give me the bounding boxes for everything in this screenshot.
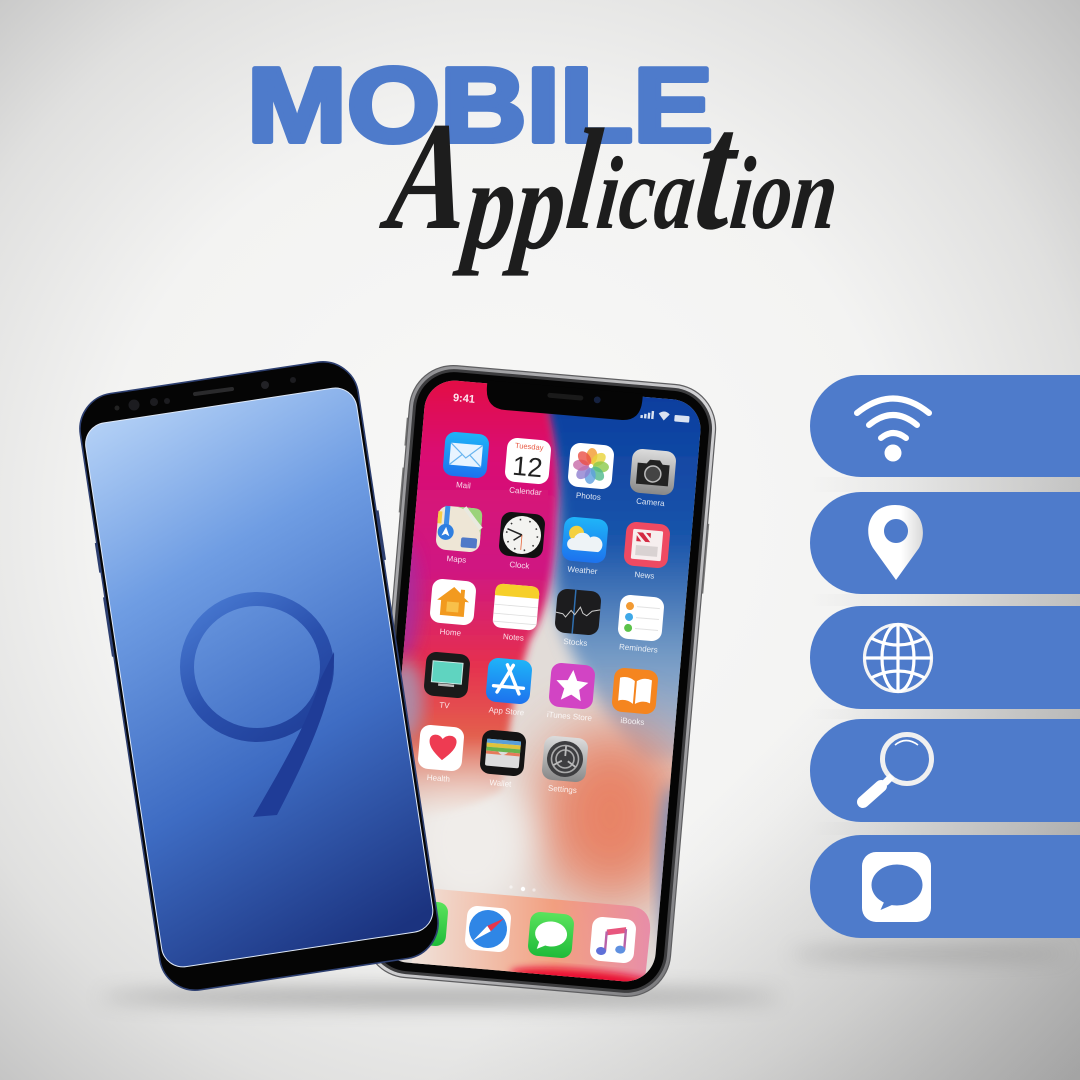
dock — [412, 889, 650, 982]
app: Calendar: Tuesday — [515, 441, 544, 452]
app: Music — [589, 916, 637, 964]
floor shadow — [100, 950, 1070, 1005]
app: Maps — [434, 505, 483, 566]
title: Application: ication — [592, 77, 843, 265]
app: Photos: Photos — [576, 491, 601, 502]
app: Weather: Weather — [567, 565, 598, 576]
app: Mail — [441, 431, 490, 492]
app: Calendar — [503, 437, 552, 498]
app: Clock: Clock — [509, 560, 531, 571]
bar: search — [810, 719, 1080, 822]
app: Home: Home — [439, 627, 462, 638]
app: Camera — [628, 448, 677, 509]
app: Calendar: Calendar — [509, 486, 542, 497]
samsung screen — [83, 386, 435, 969]
app: Health — [416, 724, 465, 785]
iphone frame — [359, 362, 721, 1000]
title: MOBILE: MOBILE — [247, 46, 713, 164]
title: Application: A — [375, 90, 479, 262]
icon: map pin — [868, 505, 923, 580]
app: Wallet: Wallet — [489, 778, 512, 789]
app: Reminders: Reminders — [619, 642, 658, 655]
app: Health: Health — [426, 773, 450, 784]
bar shadows — [810, 477, 1080, 835]
app: Notes: Notes — [503, 632, 524, 643]
app: News: News — [634, 570, 655, 581]
status bar: 9:41 — [452, 392, 475, 406]
app: Camera: Camera — [636, 497, 666, 508]
app: Stocks — [553, 588, 602, 649]
icon: chat bubble — [862, 852, 931, 922]
icon: globe — [864, 624, 932, 692]
iphone notch — [485, 380, 643, 422]
app: Home — [428, 578, 477, 639]
app: News — [622, 521, 671, 582]
app: Messages — [527, 911, 575, 959]
app: iBooks: iBooks — [620, 716, 645, 727]
bar: messages — [810, 835, 1080, 938]
app: TV: TV — [439, 700, 451, 710]
bar: wifi — [810, 375, 1080, 477]
bar: location — [810, 492, 1080, 594]
iPhone — [376, 365, 716, 997]
app: Mail: Mail — [456, 480, 471, 491]
samsung body — [73, 357, 445, 995]
bar: globe — [810, 606, 1080, 709]
iphone wallpaper — [398, 380, 700, 982]
app: Maps: Maps — [446, 554, 467, 565]
feature bars — [810, 375, 1080, 938]
app: TV — [422, 651, 471, 712]
app: iBooks — [610, 667, 659, 728]
status bar — [452, 392, 690, 423]
app: Photos — [566, 442, 615, 503]
app: Clock — [497, 511, 546, 572]
Samsung phone — [73, 357, 445, 995]
app: iTunes Store: iTunes Store — [547, 710, 593, 723]
app: Notes — [491, 583, 540, 644]
title: Application: pp — [451, 134, 573, 277]
icon: wifi — [857, 398, 929, 462]
title: Application: l — [560, 100, 608, 260]
app: Wallet — [478, 729, 527, 790]
app: App Store: App Store — [488, 705, 525, 717]
app: iTunes Store — [547, 662, 597, 723]
app: Phone — [401, 899, 449, 947]
samsung number 9 — [187, 599, 334, 817]
app: App Store — [484, 657, 533, 718]
app: Stocks: Stocks — [563, 637, 588, 648]
app: Settings — [540, 735, 589, 796]
app: Weather — [560, 516, 609, 577]
app: Reminders — [616, 594, 665, 655]
samsung sensors — [114, 377, 296, 410]
icon: magnifier — [863, 734, 932, 802]
app: Safari — [464, 905, 512, 953]
app: Calendar: 12 — [511, 451, 544, 483]
page dots — [509, 885, 536, 892]
app: Settings: Settings — [548, 784, 577, 795]
